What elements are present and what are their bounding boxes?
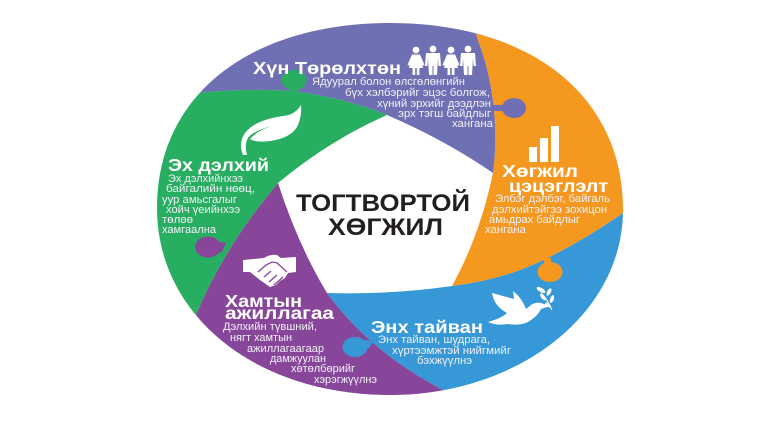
text: Хүн Төрөлхтөн description: хүний эрхийг дээдлэн — [377, 98, 491, 110]
panel: Энх тайван — [327, 213, 623, 390]
puzzle knob: green top — [282, 70, 306, 93]
icon: leaf — [241, 105, 301, 155]
text: Эх дэлхий description: төлөө — [162, 214, 193, 226]
icon: four people — [408, 46, 476, 75]
text: Эх дэлхий description: байгалийн нөөц, — [166, 183, 255, 195]
heading: Хөгжил цэцэглэлт: цэцэглэлт — [509, 176, 608, 196]
heading: Энх тайван: Энх тайван — [371, 317, 483, 337]
panel: Эх дэлхий — [157, 70, 387, 316]
text: Эх дэлхий description: Эх дэлхийнхээ — [168, 173, 243, 185]
text: Эх дэлхий description: хойч үеийнхээ — [166, 204, 240, 216]
panel: Хөгжил цэцэглэлт — [452, 33, 623, 286]
text: Эх дэлхий description: хамгаална — [162, 224, 217, 236]
icon: dove with olive branch — [488, 286, 555, 325]
text: Хөгжил цэцэглэлт description: хангана — [485, 224, 527, 236]
panel: Хүн Төрөлхтөн background — [200, 23, 526, 173]
heading: Хамтын ажиллагаа — [225, 291, 334, 323]
text: Хамтын ажиллагаа description: нягт хамтын — [230, 332, 292, 344]
text: Хүн Төрөлхтөн description: эрх тэгш байдлыг — [398, 108, 491, 120]
panel: Хамтын ажиллагаа — [196, 183, 444, 395]
heading: Хүн Төрөлхтөн: Хүн Төрөлхтөн — [253, 58, 401, 78]
puzzle knob: periwinkle — [490, 98, 526, 118]
puzzle knob: orange — [538, 258, 562, 282]
text: Хүн Төрөлхтөн description: Ядуурал болон өлсгөлөнгийн — [312, 76, 465, 88]
text: Энх тайван description: бэхжүүлнэ — [417, 355, 472, 367]
text: Энх тайван description — [378, 334, 511, 367]
heading: Хөгжил цэцэглэлт: Хөгжил — [502, 161, 578, 181]
text: Энх тайван description: хүртээмжтэй нийгмийг — [392, 345, 511, 357]
title: ХӨГЖИЛ — [328, 214, 443, 241]
text: Хүн Төрөлхтөн description: хангана — [452, 118, 494, 130]
text: Хөгжил цэцэглэлт description: дэлхийтэйгээ зохицон — [492, 204, 607, 216]
heading: Хөгжил цэцэглэлт — [502, 161, 608, 196]
text: Хамтын ажиллагаа description — [223, 321, 377, 386]
text: Хөгжил цэцэглэлт description: амьдрах байдлыг — [489, 214, 580, 226]
icon: handshake — [243, 255, 296, 287]
text: Энх тайван description: Энх тайван, шудрага, — [378, 334, 490, 346]
text: Хамтын ажиллагаа description: Дэлхийн түвшний, — [223, 321, 317, 333]
title: ТОГТВОРТОЙ — [296, 189, 470, 217]
heading: Эх дэлхий: Эх дэлхий — [168, 155, 269, 175]
puzzle knob: purple into green — [195, 236, 226, 258]
title — [296, 189, 470, 241]
text: Хөгжил цэцэглэлт description: Элбэг дэлбэг, байгаль — [495, 193, 610, 205]
heading: Хамтын ажиллагаа: Хамтын — [225, 291, 302, 311]
text: Хөгжил цэцэглэлт description — [485, 193, 610, 236]
text: Хамтын ажиллагаа description: дамжуулан — [270, 353, 326, 365]
heading: Хамтын ажиллагаа: ажиллагаа — [225, 303, 334, 323]
puzzle knob: blue — [342, 337, 374, 357]
text: Эх дэлхий description — [162, 173, 255, 236]
text: Хамтын ажиллагаа description: хэрэгжүүлнэ — [314, 374, 377, 386]
text: Хамтын ажиллагаа description: ажиллагаагаар — [247, 343, 324, 355]
text: Хамтын ажиллагаа description: хөтөлбөрийг — [291, 363, 355, 375]
icon: bar chart — [529, 126, 559, 162]
text: Эх дэлхий description: уур амьсгалыг — [162, 194, 237, 206]
text: Хүн Төрөлхтөн description — [312, 76, 494, 130]
text: Хүн Төрөлхтөн description: бүх хэлбэрийг эцэс болгож, — [345, 87, 490, 99]
